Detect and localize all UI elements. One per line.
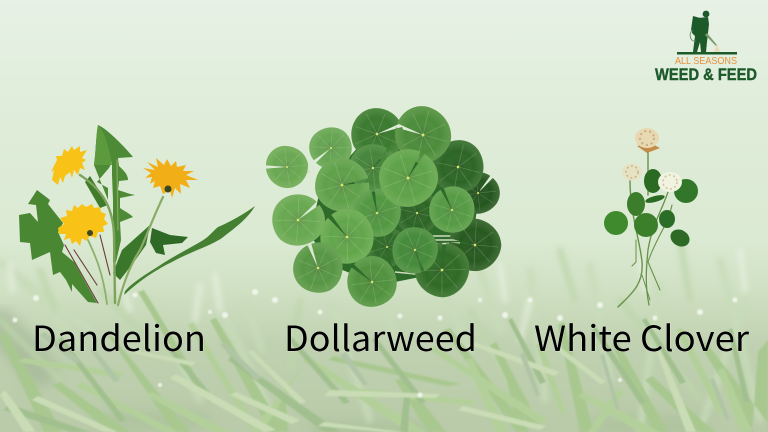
- label: White Clover: White Clover: [534, 311, 749, 362]
- clover flower top: [635, 128, 660, 153]
- logo text: WEED & FEED: WEED & FEED: [655, 66, 757, 84]
- dandelion flower left: [51, 146, 87, 185]
- clover flower right: [658, 172, 682, 192]
- grass blades: [0, 290, 768, 432]
- logo icon: man spraying: [677, 11, 737, 55]
- logo: All Seasons Weed & Feed: [655, 11, 757, 84]
- dandelion plant: [19, 11, 757, 362]
- dollarweed leaves: [261, 99, 508, 317]
- logo text: ALL SEASONS: ALL SEASONS: [675, 55, 737, 67]
- clover flower left: [622, 164, 642, 180]
- label: Dandelion: Dandelion: [32, 311, 206, 362]
- clover stems: [618, 150, 672, 307]
- dandelion leaves: [19, 125, 255, 303]
- dandelion flower right: [143, 158, 198, 198]
- white clover plant: [604, 128, 698, 307]
- clover leaves: [604, 169, 698, 250]
- dandelion stems: [65, 160, 163, 305]
- label: Dollarweed: Dollarweed: [284, 311, 477, 362]
- dollarweed plant: [261, 99, 508, 317]
- dollarweed backing: [310, 145, 480, 285]
- dollarweed stems: [300, 150, 462, 275]
- dandelion flower middle: [58, 204, 108, 246]
